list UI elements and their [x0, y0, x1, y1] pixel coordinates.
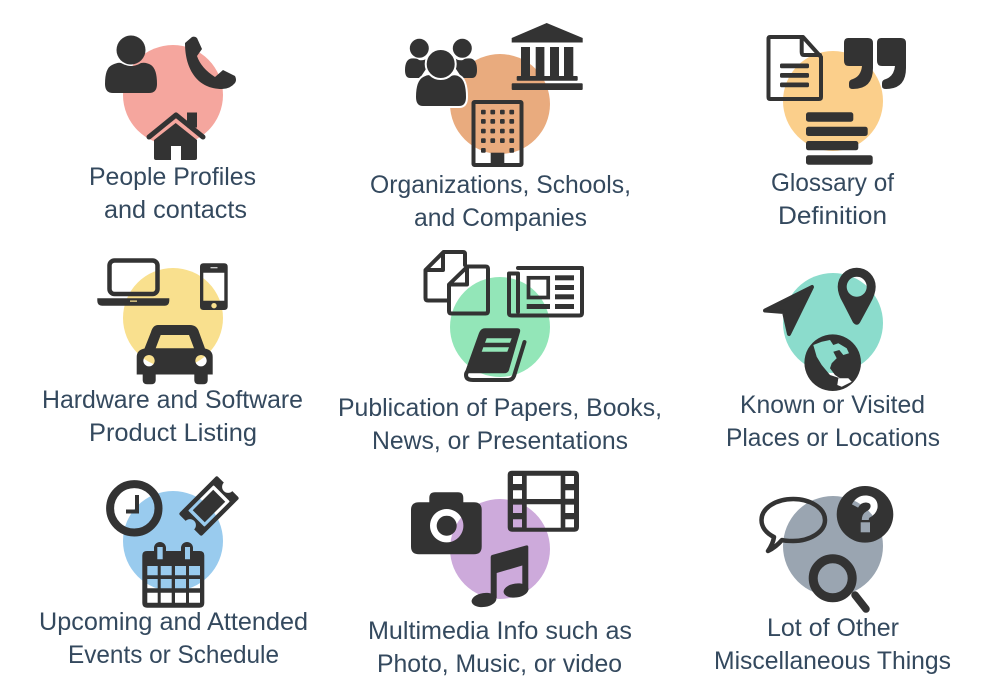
- icon: laptop: [97, 260, 169, 306]
- icon: bank building: [512, 23, 583, 90]
- icon: office tower: [474, 102, 522, 166]
- label: [89, 163, 256, 224]
- label: Glossary of: [771, 169, 894, 197]
- panel: publications: [338, 252, 662, 455]
- icon: phone: [185, 37, 236, 89]
- panel: hardware and software: [42, 260, 303, 447]
- panel: multimedia: [368, 471, 632, 678]
- colour disc: [450, 54, 550, 154]
- label: Definition: [778, 202, 887, 230]
- icon: globe: [804, 334, 861, 391]
- label: Publication of Papers, Books,: [338, 394, 662, 422]
- panel: people profiles: [89, 36, 256, 224]
- icon: car: [137, 325, 213, 384]
- label: Photo, Music, or video: [377, 650, 622, 678]
- panel: miscellaneous: [714, 486, 951, 675]
- colour disc: [783, 496, 883, 596]
- label: and Companies: [414, 204, 587, 232]
- icon: film strip: [508, 471, 579, 532]
- label: Upcoming and Attended: [39, 608, 308, 636]
- icon: smartphone: [200, 263, 228, 310]
- colour disc: [123, 268, 223, 368]
- icon: newspaper: [509, 268, 582, 316]
- icon: camera: [411, 492, 482, 554]
- label: and contacts: [104, 196, 247, 224]
- icon: calendar: [142, 542, 204, 608]
- panel: organizations: [370, 23, 631, 232]
- icon: house: [149, 112, 203, 160]
- label: [39, 608, 308, 669]
- icon: book: [465, 328, 524, 380]
- colour disc: [783, 273, 883, 373]
- label: [368, 617, 632, 678]
- icon: question mark: [837, 486, 893, 543]
- label: Events or Schedule: [68, 641, 279, 669]
- icon: magnifying glass: [813, 559, 866, 609]
- label: [726, 391, 940, 452]
- label: [714, 614, 951, 675]
- icon: text lines: [806, 112, 873, 165]
- label: Hardware and Software: [42, 386, 303, 414]
- label: Lot of Other: [767, 614, 899, 642]
- panel: glossary: [768, 37, 906, 230]
- label: Known or Visited: [740, 391, 925, 419]
- icon: ticket: [179, 476, 239, 536]
- icon: paper documents: [426, 252, 488, 314]
- colour disc: [450, 499, 550, 599]
- label: Product Listing: [89, 419, 257, 447]
- icon: music note: [471, 545, 529, 609]
- label: News, or Presentations: [372, 427, 628, 455]
- label: [370, 171, 631, 232]
- colour disc: [123, 491, 223, 591]
- icon: group of people: [405, 39, 477, 107]
- panel: places: [726, 268, 940, 452]
- label: Organizations, Schools,: [370, 171, 631, 199]
- label: People Profiles: [89, 163, 256, 191]
- colour disc: [450, 277, 550, 377]
- panel: events: [39, 476, 308, 669]
- colour disc: [123, 45, 223, 145]
- label: [42, 386, 303, 447]
- icon: person: [105, 36, 157, 93]
- label: [338, 394, 662, 455]
- colour disc: [783, 51, 883, 151]
- label: [771, 169, 894, 230]
- label: Miscellaneous Things: [714, 647, 951, 675]
- label: Places or Locations: [726, 424, 940, 452]
- icon: navigation arrow: [765, 287, 812, 334]
- icon: speech bubble: [762, 499, 825, 551]
- label: Multimedia Info such as: [368, 617, 632, 645]
- icon: clock: [110, 484, 158, 532]
- icon: quotation marks: [844, 38, 906, 89]
- icon: document: [768, 37, 821, 99]
- icon: map pin: [838, 268, 876, 325]
